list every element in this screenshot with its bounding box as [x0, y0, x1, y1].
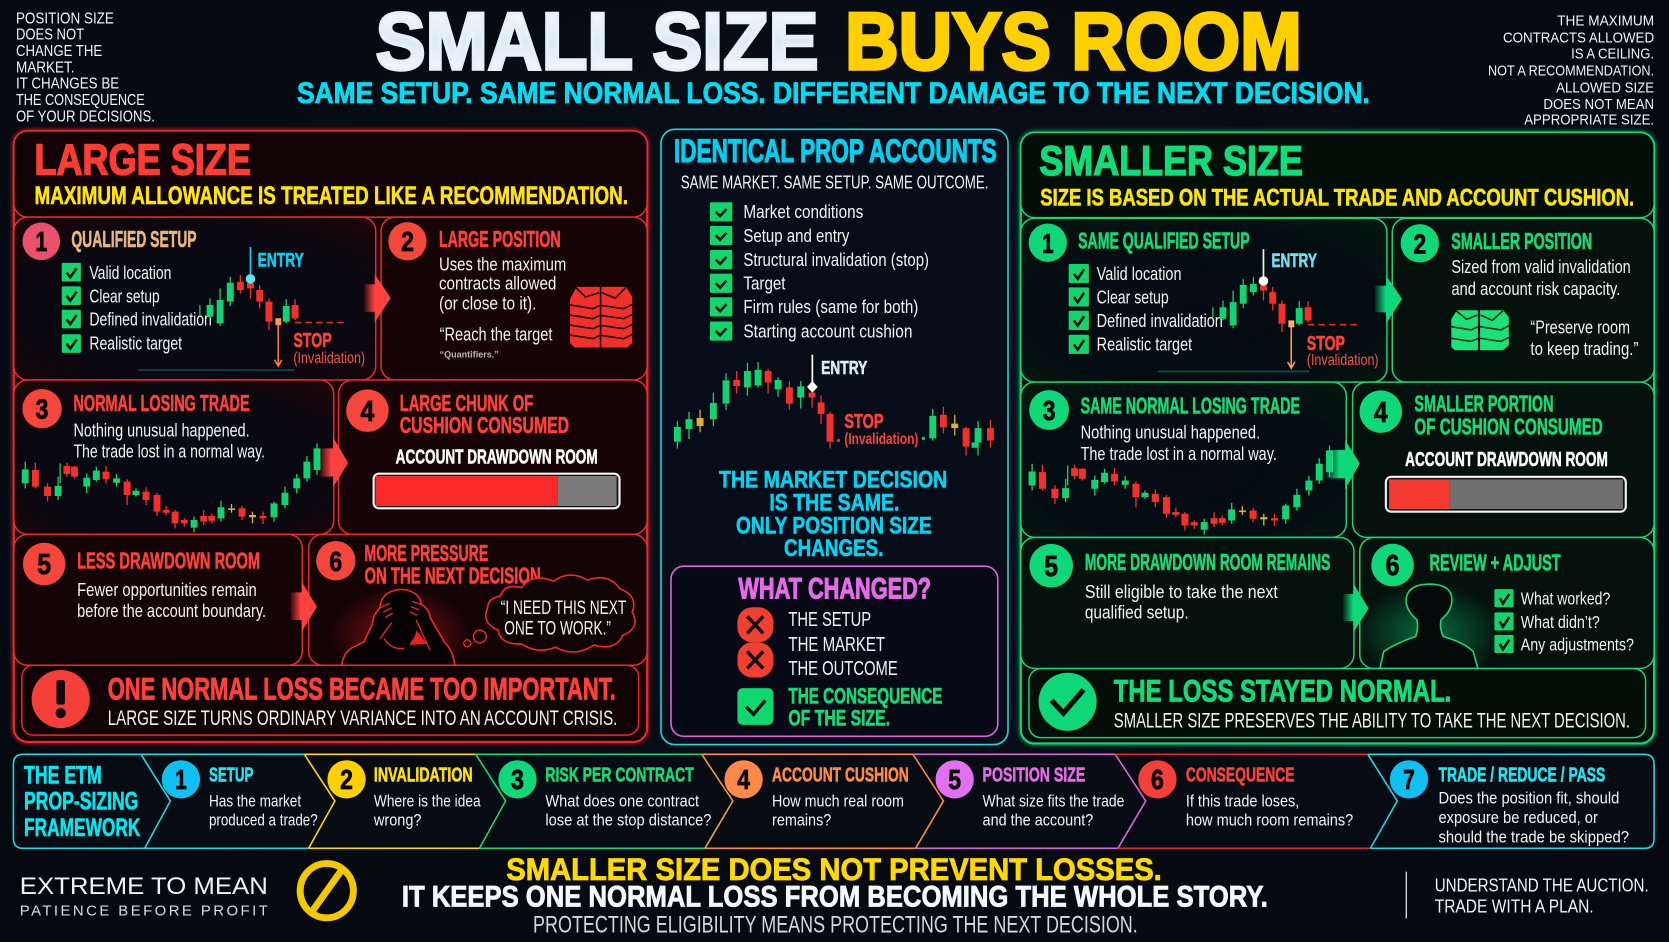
drawdown bar: small: [1386, 477, 1626, 512]
step 4: large chunk of cushion: CUSHION CONSUMED: [400, 412, 569, 438]
framework step 6: If this trade loses,: [1186, 791, 1299, 810]
brand block: PATIENCE BEFORE PROFIT: [20, 904, 268, 920]
framework step 1: SETUP: [209, 765, 253, 787]
arrow: step 1 to step 2: [1375, 276, 1402, 324]
step 6: more pressure: MORE PRESSURE: [364, 540, 488, 566]
closing statement: PROTECTING ELIGIBILITY MEANS PROTECTING THE NEXT DECISION.: [533, 912, 1138, 939]
step 1: qualified setup: Valid location: [89, 262, 171, 283]
candlestick chart: same losing trade: [1032, 445, 1330, 534]
framework step 6: [1138, 760, 1353, 829]
framework step 3: lose at the stop distance?: [545, 810, 711, 829]
step 5: less drawdown room: Fewer opportunities remain: [77, 579, 257, 600]
framework step 1: produced a trade?: [209, 810, 318, 829]
step 1: same qualified setup: SAME QUALIFIED SETUP: [1078, 227, 1250, 253]
icon: calm person: [1380, 584, 1478, 668]
step 5: less drawdown room: LESS DRAWDOWN ROOM: [77, 547, 260, 573]
arrow: step 1 to step 2: [364, 274, 391, 323]
step 1: same qualified setup: Defined invalidation: [1097, 310, 1223, 331]
what changed box: THE CONSEQUENCE: [788, 684, 942, 709]
step 3: same normal losing trade: The trade lost in a normal way.: [1081, 443, 1277, 464]
step 5: less drawdown room: before the account boundary.: [77, 600, 266, 621]
framework step 7: should the trade be skipped?: [1438, 827, 1629, 846]
setup chart: ENTRY: [1271, 251, 1317, 272]
panel: identical prop accounts: IDENTICAL PROP ACCOUNTS: [674, 133, 997, 169]
framework step 3: RISK PER CONTRACT: [545, 765, 694, 787]
step 2: large position: contracts allowed: [439, 274, 556, 294]
step 1: qualified setup: QUALIFIED SETUP: [71, 226, 197, 252]
identical checklist: Market conditions: [743, 202, 863, 222]
note: maximum contracts: APPROPRIATE SIZE.: [1524, 113, 1654, 129]
step 6: review and adjust: 6: [1386, 550, 1399, 582]
icon: check badge: [737, 688, 773, 725]
step 3: normal losing trade: NORMAL LOSING TRADE: [73, 390, 250, 416]
note: maximum contracts: IS A CEILING.: [1571, 47, 1654, 63]
step 4: smaller portion of cushion: [1353, 382, 1654, 537]
drawdown bar: large: [374, 474, 619, 508]
step 3: normal losing trade: 3: [36, 393, 48, 424]
step 5: more drawdown room remains: MORE DRAWDOWN ROOM REMAINS: [1085, 549, 1330, 575]
what changed box: THE MARKET: [788, 634, 885, 656]
note: position size: OF YOUR DECISIONS.: [16, 108, 155, 125]
step 4: large chunk of cushion: ACCOUNT DRAWDOWN ROOM: [396, 445, 598, 468]
framework step 1: Has the market: [209, 791, 301, 810]
step 5: more drawdown room remains: [1021, 538, 1354, 668]
step 2: smaller position: “Preserve room: [1530, 318, 1630, 338]
review checklist: What worked?: [1521, 589, 1610, 609]
callout: loss stayed normal: THE LOSS STAYED NORMAL.: [1114, 674, 1451, 709]
step 2: smaller position: and account risk capacity.: [1451, 279, 1620, 299]
framework step 7: 7: [1403, 764, 1415, 795]
framework step 2: INVALIDATION: [374, 765, 473, 787]
arrow: step 5 to step 6: [290, 582, 317, 632]
panel: smaller size: [1021, 133, 1654, 743]
motto: [1406, 872, 1649, 918]
note: maximum contracts: ALLOWED SIZE: [1556, 81, 1654, 97]
icon: prohibited sign: [300, 864, 353, 918]
what changed box: THE OUTCOME: [788, 658, 898, 680]
candlestick chart: identical setup: [677, 355, 990, 455]
large size heading: LARGE SIZE: [34, 137, 251, 185]
step 1: same qualified setup: Clear setup: [1097, 286, 1169, 307]
title: [376, 0, 1302, 87]
note: position size: DOES NOT: [16, 27, 85, 44]
panel: identical prop accounts: SAME MARKET. SAME SETUP. SAME OUTCOME.: [681, 171, 988, 192]
framework step 4: ACCOUNT CUSHION: [772, 765, 909, 787]
step 5: more drawdown room remains: qualified setup.: [1085, 601, 1189, 622]
note: position size: MARKET.: [16, 59, 75, 76]
setup chart: (Invalidation): [293, 350, 365, 367]
step 4: large chunk of cushion: 4: [361, 396, 374, 428]
framework step 7: exposure be reduced, or: [1438, 808, 1598, 827]
step 6: more pressure: ON THE NEXT DECISION: [364, 562, 541, 588]
step 3: normal losing trade: [14, 380, 334, 534]
step 2: smaller position: to keep trading.”: [1530, 339, 1638, 359]
closing statement: IT KEEPS ONE NORMAL LOSS FROM BECOMING THE WHOLE STORY.: [402, 882, 1268, 914]
framework step 3: 3: [511, 764, 524, 795]
step 4: large chunk of cushion: [338, 380, 647, 534]
step 6: review and adjust: REVIEW + ADJUST: [1430, 550, 1561, 576]
what changed box: [671, 566, 998, 736]
icon: large contract stacks: [570, 287, 632, 347]
step 1: same qualified setup: [1021, 218, 1387, 382]
step 2: large position: [381, 217, 647, 380]
framework title: FRAMEWORK: [24, 814, 140, 842]
note: position size: IT CHANGES BE: [16, 76, 119, 93]
note: position size: THE CONSEQUENCE: [16, 92, 145, 109]
step 6: review and adjust: [1355, 538, 1654, 677]
framework step 6: CONSEQUENCE: [1186, 765, 1295, 787]
icon: stressed person: [342, 589, 455, 665]
step 1: same qualified setup: Realistic target: [1097, 334, 1193, 355]
closing statement: [402, 852, 1268, 939]
step 2: large position: “Quantifiers.”: [440, 350, 499, 361]
framework bar: [13, 754, 1654, 848]
step 3: normal losing trade: The trade lost in a normal way.: [73, 441, 265, 462]
large size heading: MAXIMUM ALLOWANCE IS TREATED LIKE A RECOMMENDATION.: [34, 182, 628, 210]
smaller size heading: SMALLER SIZE: [1039, 137, 1303, 184]
arrow: step 5 to step 6: [1343, 583, 1369, 633]
candlestick chart: losing trade: [25, 443, 317, 532]
arrow: step 3 to step 4: [1326, 440, 1360, 489]
step 2: large position: “Reach the target: [440, 325, 552, 345]
step 4: smaller portion of cushion: 4: [1374, 397, 1388, 429]
framework step 7: Does the position fit, should: [1438, 789, 1619, 808]
thought bubble: ONE TO WORK.”: [504, 618, 611, 639]
market decision statement: THE MARKET DECISION: [719, 466, 947, 493]
setup chart: STOP: [293, 330, 332, 352]
framework title: THE ETM: [24, 761, 102, 789]
step 2: smaller position: [1392, 218, 1654, 382]
thought bubble: “I NEED THIS NEXT: [501, 598, 627, 619]
step 2: smaller position: Sized from valid invalidation: [1451, 257, 1631, 277]
step 1: qualified setup: Realistic target: [89, 333, 183, 354]
subtitle: SAME SETUP. SAME NORMAL LOSS. DIFFERENT DAMAGE TO THE NEXT DECISION.: [297, 78, 1370, 110]
framework title: [24, 761, 140, 842]
review checklist: What didn’t?: [1521, 612, 1600, 632]
framework step 2: 2: [340, 764, 353, 795]
step 2: large position: LARGE POSITION: [439, 226, 561, 252]
brand block: [20, 873, 268, 920]
callout: loss stayed normal: [1029, 669, 1646, 738]
framework step 6: 6: [1151, 764, 1164, 795]
framework step 1: [162, 760, 318, 829]
note: position size: CHANGE THE: [16, 43, 102, 60]
note: maximum contracts: DOES NOT MEAN: [1543, 97, 1654, 113]
note: maximum contracts: [1488, 13, 1654, 129]
setup chart: [138, 247, 365, 370]
callout: loss too important: ONE NORMAL LOSS BECAME TOO IMPORTANT.: [108, 671, 616, 706]
framework step 4: 4: [737, 764, 750, 795]
step 1: qualified setup: [14, 217, 376, 380]
identical checklist: Setup and entry: [743, 226, 849, 246]
framework step 5: [936, 760, 1124, 829]
framework step 5: and the account?: [983, 810, 1093, 829]
what changed box: THE SETUP: [788, 609, 871, 631]
icon: small contract stacks: [1451, 311, 1509, 350]
setup chart: ENTRY: [258, 251, 304, 272]
step 3: same normal losing trade: [1021, 382, 1346, 537]
note: position size: POSITION SIZE: [16, 10, 114, 27]
step 4: large chunk of cushion: LARGE CHUNK OF: [400, 390, 533, 416]
framework step 2: Where is the idea: [374, 791, 481, 810]
smaller size heading: [1021, 133, 1654, 218]
step 1: same qualified setup: Valid location: [1097, 263, 1181, 284]
framework step 7: [1390, 760, 1629, 846]
step 1: qualified setup: Clear setup: [89, 285, 160, 306]
market decision statement: ONLY POSITION SIZE: [736, 512, 932, 539]
setup chart: (Invalidation): [1307, 352, 1379, 369]
review checklist: [1496, 589, 1634, 654]
brand block: EXTREME TO MEAN: [20, 873, 268, 900]
candlestick chart: identical setup: (Invalidation): [844, 431, 918, 448]
setup chart: [1158, 249, 1379, 371]
framework step 2: wrong?: [373, 810, 422, 829]
identical checklist: [711, 202, 929, 341]
step 6: more pressure: [309, 534, 647, 677]
framework step 6: how much room remains?: [1186, 810, 1353, 829]
step 2: large position: Uses the maximum: [439, 254, 566, 274]
review checklist: Any adjustments?: [1521, 634, 1634, 654]
market decision statement: CHANGES.: [784, 535, 883, 562]
identical checklist: Firm rules (same for both): [743, 297, 918, 317]
thought bubble: [464, 575, 635, 652]
icon: x badges: [737, 607, 773, 677]
step 1: same qualified setup: 1: [1042, 228, 1054, 259]
market decision statement: IS THE SAME.: [769, 490, 899, 517]
framework step 1: 1: [175, 764, 187, 795]
market decision statement: [719, 466, 947, 562]
closing statement: SMALLER SIZE DOES NOT PREVENT LOSSES.: [506, 852, 1162, 887]
framework title: PROP-SIZING: [24, 787, 138, 815]
identical checklist: Target: [743, 274, 786, 294]
note: maximum contracts: CONTRACTS ALLOWED: [1503, 31, 1654, 47]
candlestick chart: identical setup: STOP: [844, 410, 884, 433]
step 2: large position: (or close to it).: [439, 294, 536, 314]
callout: loss too important: LARGE SIZE TURNS ORDINARY VARIANCE INTO AN ACCOUNT CRISIS.: [108, 706, 617, 730]
callout: loss too important: [22, 665, 639, 735]
framework step 4: [724, 760, 909, 829]
arrow: step 3 to step 4: [320, 437, 348, 487]
framework chevrons: [13, 754, 1654, 848]
note: maximum contracts: THE MAXIMUM: [1557, 13, 1654, 29]
step 5: less drawdown room: 5: [37, 549, 51, 581]
step 6: more pressure: 6: [329, 546, 342, 577]
step 3: same normal losing trade: 3: [1043, 395, 1055, 426]
step 3: same normal losing trade: SAME NORMAL LOSING TRADE: [1081, 392, 1300, 418]
framework step 3: What does one contract: [545, 791, 699, 810]
panel: identical prop accounts: [661, 129, 1008, 745]
what changed box: OF THE SIZE.: [788, 705, 890, 730]
step 1: qualified setup: Defined invalidation: [89, 309, 212, 330]
motto: TRADE WITH A PLAN.: [1435, 895, 1594, 916]
framework step 3: [498, 760, 711, 829]
step 2: smaller position: 2: [1413, 228, 1426, 259]
step 3: same normal losing trade: Nothing unusual happened.: [1081, 422, 1260, 443]
note: position size: [16, 10, 155, 125]
candlestick chart: identical setup: ENTRY: [821, 357, 868, 378]
panel: large size: [14, 131, 647, 742]
framework step 4: How much real room: [772, 791, 904, 810]
setup chart: STOP: [1307, 333, 1345, 355]
framework step 2: [327, 760, 481, 829]
step 4: smaller portion of cushion: SMALLER PORTION: [1414, 391, 1554, 417]
identical checklist: Structural invalidation (stop): [743, 250, 929, 270]
step 1: qualified setup: 1: [35, 226, 47, 257]
framework step 5: 5: [948, 764, 961, 795]
large size heading: [14, 131, 647, 217]
step 3: normal losing trade: Nothing unusual happened.: [73, 419, 250, 440]
framework step 5: What size fits the trade: [983, 791, 1124, 810]
step 2: large position: 2: [401, 226, 414, 257]
framework step 5: POSITION SIZE: [983, 765, 1085, 787]
step 5: more drawdown room remains: Still eligible to take the next: [1085, 581, 1279, 602]
framework step 4: remains?: [772, 810, 831, 829]
what changed box: WHAT CHANGED?: [738, 572, 931, 605]
step 5: more drawdown room remains: 5: [1044, 551, 1058, 583]
step 5: less drawdown room: [14, 534, 302, 665]
identical checklist: Starting account cushion: [743, 321, 912, 341]
